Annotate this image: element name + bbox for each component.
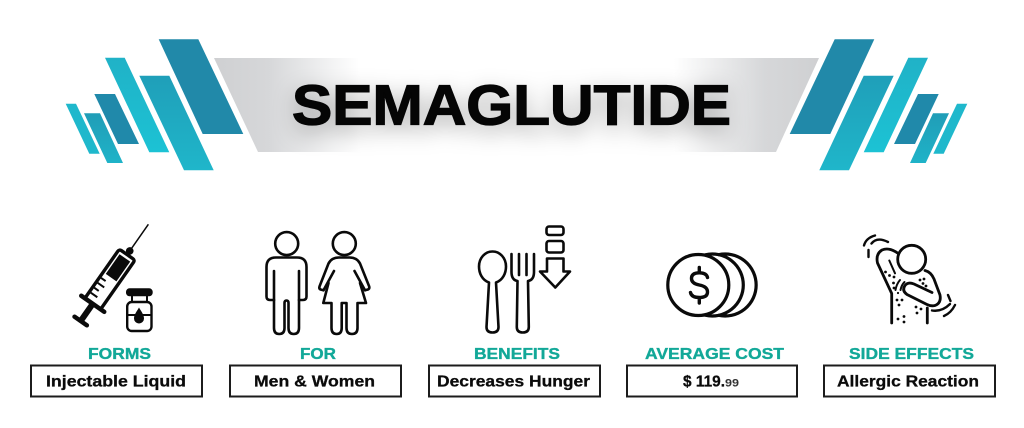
right decorative bars bbox=[790, 39, 967, 170]
banner band bbox=[214, 58, 819, 152]
icon: stacked food down arrow bbox=[540, 226, 570, 288]
value box: decreases hunger bbox=[429, 366, 600, 396]
value box: injectable liquid bbox=[31, 366, 202, 396]
rash dots bbox=[884, 271, 927, 323]
panel: average cost bbox=[627, 254, 797, 396]
title: SEMAGLUTIDE bbox=[292, 74, 731, 138]
label: side effects: SIDE EFFECTS bbox=[849, 346, 974, 363]
label: forms: FORMS bbox=[88, 346, 151, 363]
label: for: FOR bbox=[300, 346, 336, 363]
icon: vial bbox=[126, 288, 153, 331]
value box: men and women bbox=[230, 366, 401, 396]
icon: fork bbox=[512, 254, 534, 332]
panel: benefits bbox=[429, 226, 600, 396]
value box: price: 99 bbox=[725, 378, 739, 390]
label: average cost: AVERAGE COST bbox=[645, 346, 785, 363]
icon: syringe bbox=[69, 216, 160, 329]
value box: decreases hunger: Decreases Hunger bbox=[437, 374, 590, 390]
icon: spoon bbox=[479, 252, 506, 332]
label: benefits: BENEFITS bbox=[474, 346, 560, 363]
value box: allergic reaction: Allergic Reaction bbox=[837, 374, 979, 390]
icon: allergic reaction person scratching bbox=[864, 236, 955, 323]
panel: side effects bbox=[824, 236, 995, 396]
value box: injectable liquid: Injectable Liquid bbox=[46, 374, 186, 390]
panel: forms bbox=[31, 216, 202, 396]
title banner bbox=[214, 58, 819, 152]
icon: woman bbox=[319, 232, 369, 334]
value box: price: $ 119. bbox=[683, 374, 725, 390]
icon: coins bbox=[668, 254, 756, 316]
value box: price bbox=[627, 366, 797, 396]
value box: men and women: Men & Women bbox=[254, 374, 375, 390]
value box: allergic reaction bbox=[824, 366, 995, 396]
panel: for bbox=[230, 232, 401, 396]
icon: man bbox=[266, 232, 306, 334]
left decorative bars bbox=[66, 39, 243, 170]
